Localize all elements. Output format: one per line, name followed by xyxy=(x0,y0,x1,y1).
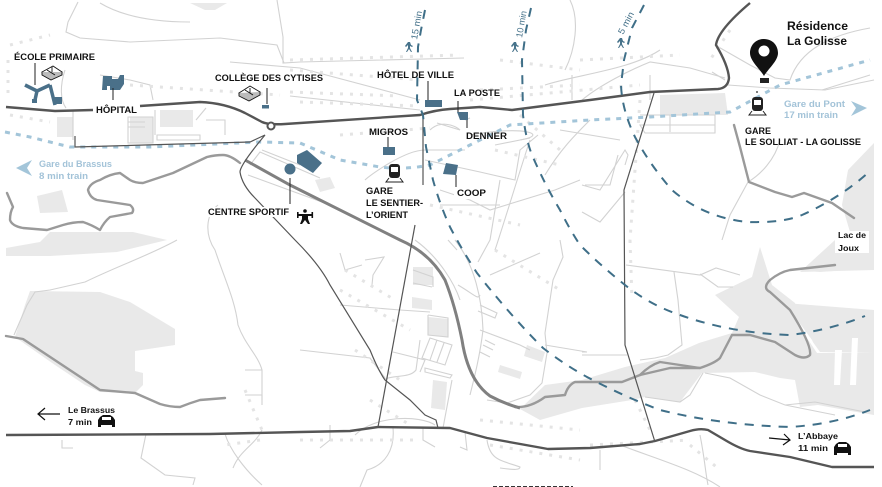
white slivers in marsh xyxy=(785,303,858,385)
label: lac de joux: Joux xyxy=(838,244,860,253)
label: la poste: LA POSTE xyxy=(454,88,500,98)
building: la poste xyxy=(457,112,468,120)
icon: car l'abbaye xyxy=(834,442,851,455)
arrow: le brassus xyxy=(38,408,60,420)
label: centre sportif: CENTRE SPORTIF xyxy=(208,207,290,217)
label: collège des cytises: COLLÈGE DES CYTISES xyxy=(215,73,323,83)
building: large hall xyxy=(297,150,322,173)
isochrone labels: 5 min xyxy=(616,10,636,36)
icon: location pin xyxy=(750,39,778,83)
roundabout xyxy=(268,122,274,130)
label: gare du brassus xyxy=(39,159,112,181)
label: gare le solliat: GARE xyxy=(745,126,771,136)
label: le brassus xyxy=(68,406,116,427)
label: migros: MIGROS xyxy=(369,127,408,137)
building dots xyxy=(8,30,730,470)
icon: sports figure xyxy=(297,209,313,224)
thin dark roads xyxy=(75,93,655,442)
icon: train la golisse xyxy=(749,91,766,115)
label: école primaire: ÉCOLE PRIMAIRE xyxy=(14,52,95,62)
label: gare le sentier: LE SENTIER- xyxy=(366,198,423,208)
walker icons xyxy=(405,38,625,52)
label: gare le solliat: LE SOLLIAT - LA GOLISSE xyxy=(745,137,861,147)
icon: train le sentier xyxy=(386,164,403,182)
label: lac de joux xyxy=(838,231,867,253)
thick curved road xyxy=(245,160,520,408)
building: coop xyxy=(443,163,458,175)
building: migros xyxy=(383,147,395,155)
isochrone labels: 10 min xyxy=(514,10,529,38)
arrow: l'abbaye xyxy=(769,434,790,445)
building: hôpital xyxy=(102,75,124,90)
label: l'abbaye: L’Abbaye xyxy=(798,432,839,441)
icon: books collège xyxy=(239,86,260,101)
arrow: gare du brassus xyxy=(16,160,32,176)
label: résidence la golisse xyxy=(787,19,848,48)
label: gare le sentier: GARE xyxy=(366,186,393,196)
building: hôtel de ville xyxy=(425,100,442,107)
arrow: gare du pont xyxy=(851,101,867,116)
isochrone labels: 15 min xyxy=(409,10,424,40)
leader lines xyxy=(35,63,467,204)
label: résidence la golisse: Résidence xyxy=(787,19,848,33)
label: gare du brassus: Gare du Brassus xyxy=(39,159,112,169)
label: coop: COOP xyxy=(457,188,486,198)
label: le brassus: 7 min xyxy=(68,418,92,427)
label: hôpital: HÔPITAL xyxy=(96,104,138,115)
label: gare le sentier: L’ORIENT xyxy=(366,210,408,220)
label: lac de joux: Lac de xyxy=(838,231,867,240)
label: gare du pont: 17 min train xyxy=(784,110,838,120)
label: résidence la golisse: La Golisse xyxy=(787,34,847,48)
white label halos xyxy=(207,186,869,253)
label: gare du pont: Gare du Pont xyxy=(784,99,845,109)
label: l'abbaye xyxy=(798,432,839,453)
label: l'abbaye: 11 min xyxy=(798,444,828,453)
building: centre sportif xyxy=(284,164,296,174)
walking isochrones xyxy=(417,5,870,427)
isochrone labels xyxy=(409,10,636,40)
label: gare du brassus: 8 min train xyxy=(39,171,88,181)
rivers xyxy=(6,125,854,407)
icon: car le brassus xyxy=(98,415,115,427)
label: hôtel de ville: HÔTEL DE VILLE xyxy=(377,69,454,80)
building: collège xyxy=(262,105,269,108)
label: gare le solliat xyxy=(745,126,861,147)
building: école primaire xyxy=(25,85,62,105)
label: denner: DENNER xyxy=(466,131,508,141)
icon: books école xyxy=(42,66,62,80)
label: le brassus: Le Brassus xyxy=(68,406,116,415)
label: gare du pont xyxy=(784,99,845,120)
label: gare le sentier xyxy=(366,186,423,220)
train line dotted xyxy=(5,60,870,168)
